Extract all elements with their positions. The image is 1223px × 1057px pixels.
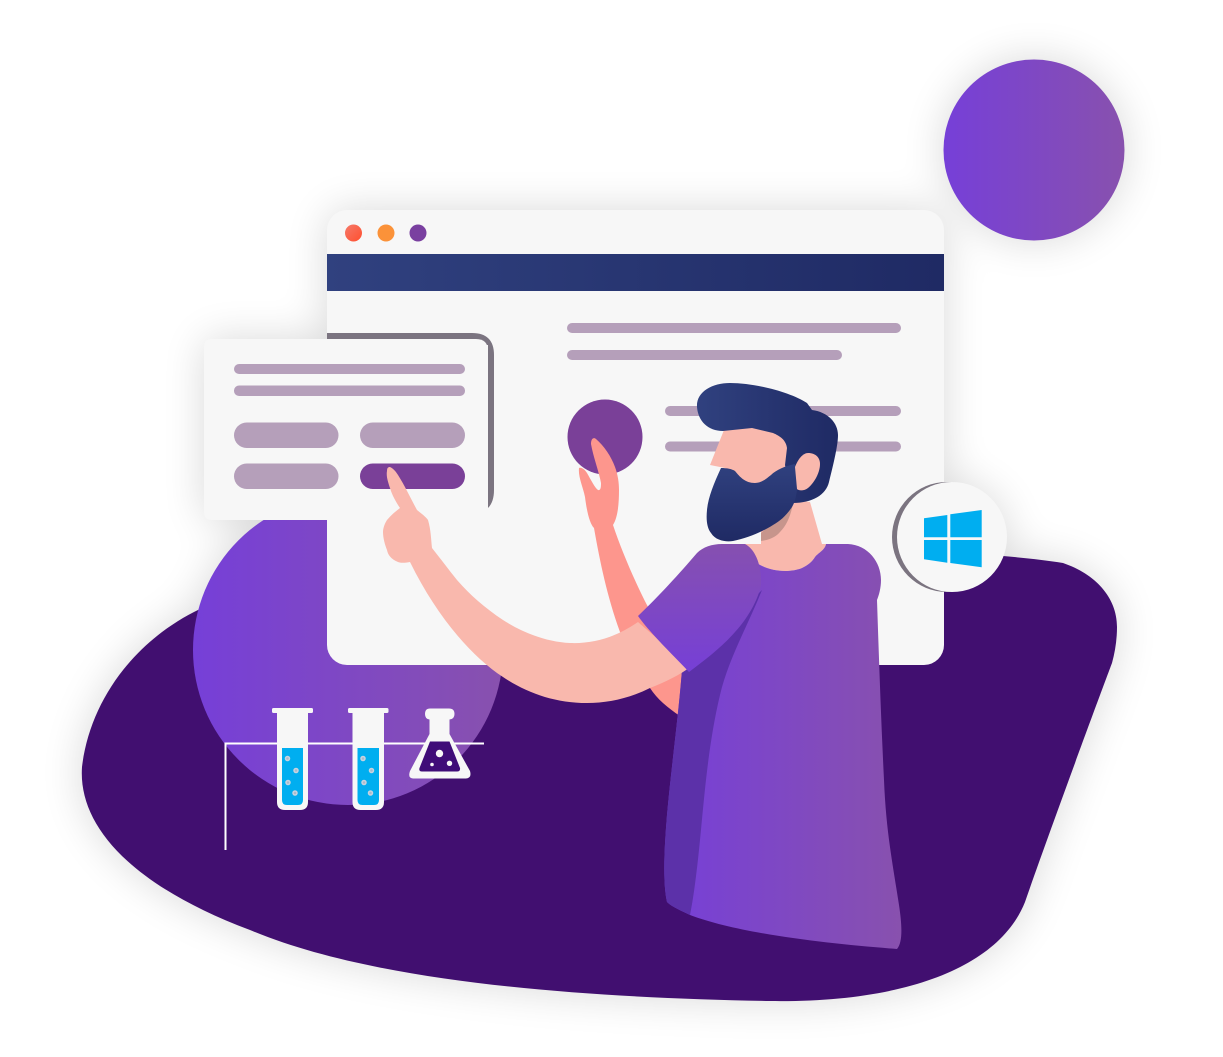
purple circle behind window — [193, 495, 503, 805]
badge circle — [897, 482, 1007, 592]
test tube 2 — [348, 708, 388, 810]
window header bar — [327, 254, 944, 291]
rack — [226, 744, 484, 850]
background blob — [82, 556, 1117, 1001]
front arm and pointing hand — [383, 467, 690, 703]
card lines — [234, 364, 465, 396]
test tube 1 — [272, 708, 313, 810]
window control dots — [345, 224, 426, 242]
ear — [795, 453, 820, 490]
card back outline — [327, 333, 494, 508]
badge crescent — [892, 482, 1002, 592]
flask — [409, 708, 470, 778]
windows logo — [924, 510, 982, 567]
floating card — [204, 333, 494, 520]
hair — [697, 383, 838, 503]
window text lines — [567, 323, 901, 452]
soft shadows — [82, 59, 1125, 1001]
neck — [743, 500, 826, 571]
windows badge — [892, 482, 1007, 592]
face — [710, 427, 796, 490]
lab rack with tubes — [226, 708, 484, 850]
person — [383, 383, 901, 949]
purple circle top right — [944, 60, 1124, 240]
shirt body — [664, 544, 901, 949]
shirt sleeve — [638, 544, 761, 672]
beard — [707, 464, 797, 541]
shirt fold shadow — [664, 590, 762, 915]
card body — [204, 339, 488, 520]
avatar circle — [568, 400, 642, 474]
browser window — [327, 210, 944, 665]
card buttons — [234, 422, 465, 489]
neck shadow — [761, 503, 793, 541]
raised back arm — [579, 438, 684, 716]
